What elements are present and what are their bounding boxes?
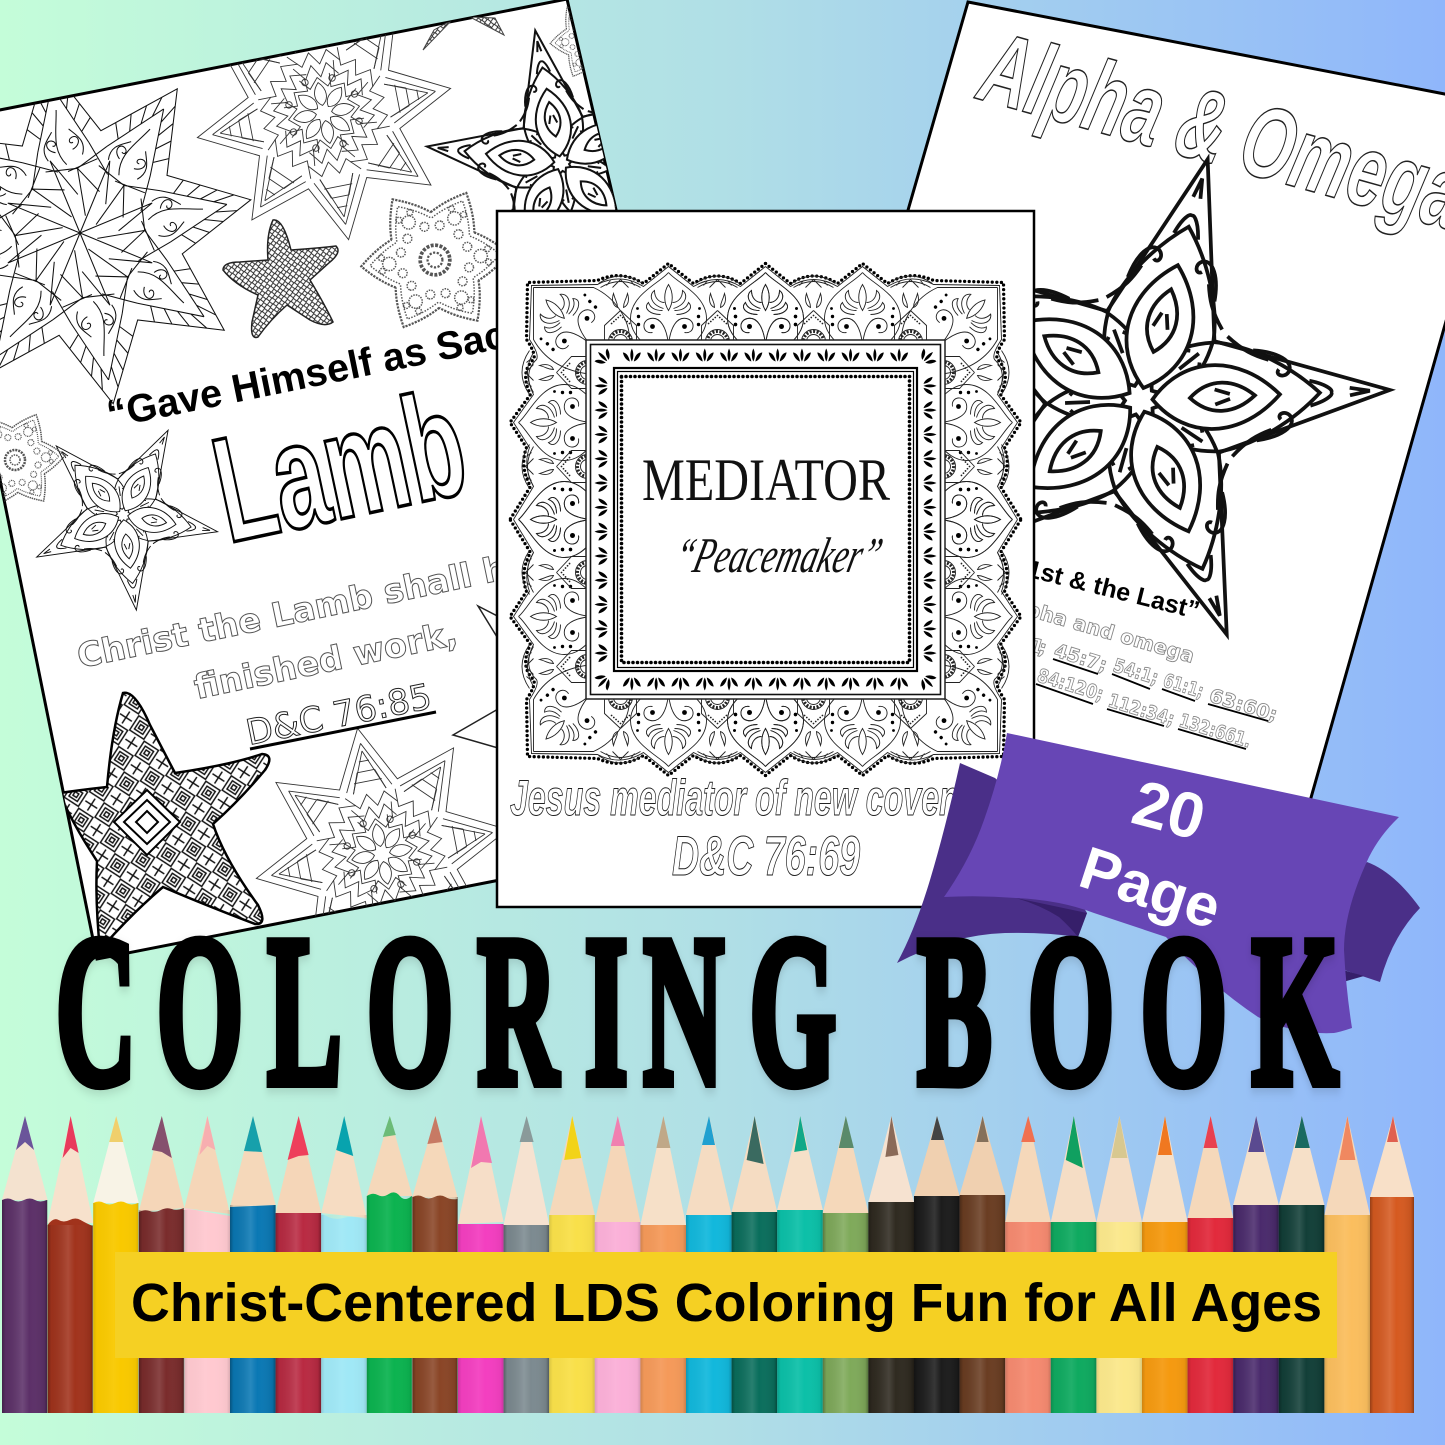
pencil: lemon bbox=[549, 1116, 595, 1413]
scripture references: 63:60; bbox=[1207, 685, 1280, 726]
pencil: olive bbox=[823, 1116, 868, 1413]
heading: gave himself: “Gave Himself as Sacrifice” bbox=[103, 290, 622, 437]
pencil: amber bbox=[1142, 1116, 1188, 1413]
reference: alpha and omega: Alpha and omega bbox=[1002, 591, 1197, 668]
pencil: orange red bbox=[1370, 1116, 1414, 1413]
star illustrations on left page bbox=[0, 0, 721, 1004]
verse reference: D&C 76:69: D&C 76:69 bbox=[672, 824, 860, 887]
pencil: light orange bbox=[1324, 1116, 1370, 1413]
scripture references: 84:120; bbox=[1035, 665, 1106, 706]
pencil: pink bbox=[184, 1116, 230, 1413]
pencil: cyan bbox=[686, 1116, 732, 1413]
verse text: Christ the Lamb: Christ the Lamb shall have bbox=[74, 534, 576, 676]
large star mandala bbox=[1035, 154, 1396, 640]
ribbon badge: 20 Page bbox=[897, 733, 1420, 1033]
ribbon back left fold bbox=[897, 763, 1087, 963]
pencil: maroon bbox=[139, 1116, 184, 1413]
pencil: green bbox=[367, 1116, 412, 1413]
ribbon label: 20: 20 bbox=[1125, 766, 1213, 854]
verse: Jesus mediator of new covenant: Jesus mediator of new covenant bbox=[510, 770, 1009, 826]
scripture references: 61:1; bbox=[1161, 670, 1206, 703]
pencil: charcoal brown bbox=[868, 1116, 914, 1413]
pencil: yellow bbox=[93, 1116, 139, 1413]
pencil: orange bbox=[640, 1116, 686, 1413]
verse text: finished work: finished work, bbox=[191, 614, 461, 707]
pencil: grey bbox=[504, 1116, 549, 1413]
pencil: crimson bbox=[276, 1116, 321, 1413]
pencil: jade green bbox=[1051, 1116, 1096, 1413]
caption: 1st & the Last: “The 1st & the Last” bbox=[962, 540, 1202, 625]
ribbon main band bbox=[944, 733, 1399, 1033]
pencil: rose bbox=[595, 1116, 640, 1413]
scripture references: 54:1; bbox=[1111, 655, 1161, 689]
pencil row bbox=[2, 1116, 1414, 1413]
scripture references: 45:7; bbox=[1052, 640, 1110, 677]
ribbon back right fold bbox=[1330, 862, 1420, 982]
pencil: brick red bbox=[48, 1116, 93, 1413]
verse reference D&C 76:85: D&C 76:85 bbox=[243, 677, 435, 754]
pencil: dark teal bbox=[732, 1116, 777, 1413]
pencil: teal bbox=[777, 1116, 823, 1413]
pencil: pale yellow bbox=[1096, 1116, 1142, 1413]
ribbon label: Page: Page bbox=[1072, 834, 1229, 942]
pencil: dark green bbox=[1279, 1116, 1324, 1413]
mandala border bbox=[510, 264, 1021, 776]
pencil: light blue bbox=[321, 1116, 367, 1413]
pencil: black bbox=[914, 1116, 960, 1413]
scripture references: 19:1; bbox=[1009, 629, 1049, 660]
panel: right coloring page "Alpha & Omega" bbox=[906, 0, 1445, 798]
square ornamental frame bbox=[586, 340, 945, 699]
pencil: purple bbox=[2, 1116, 48, 1413]
scripture references: 112:34; bbox=[1106, 690, 1177, 731]
title: COLORING BOOK: COLORING BOOK bbox=[56, 892, 1339, 1131]
subheading: Peacemaker: “Peacemaker” bbox=[669, 528, 888, 583]
yellow tagline banner bbox=[115, 1252, 1337, 1358]
pencil: dark purple bbox=[1233, 1116, 1279, 1413]
pencil: red bbox=[1188, 1116, 1233, 1413]
tagline text: Christ-Centered LDS Coloring Fun for All Ages bbox=[131, 1273, 1322, 1333]
panel: center coloring page "Mediator" bbox=[497, 211, 1034, 907]
pencil: blue bbox=[230, 1116, 276, 1413]
pencil: salmon bbox=[1005, 1116, 1051, 1413]
heading: Lamb outlined: Lamb bbox=[200, 358, 479, 574]
pencil: umber bbox=[960, 1116, 1005, 1413]
panel: left coloring page "Lamb" bbox=[0, 0, 618, 961]
pencil: magenta bbox=[458, 1116, 504, 1413]
pencil: brown bbox=[412, 1116, 458, 1413]
heading: MEDIATOR: MEDIATOR bbox=[642, 447, 890, 513]
scripture references bbox=[1009, 629, 1280, 752]
scripture references: 132:661. bbox=[1177, 710, 1254, 752]
